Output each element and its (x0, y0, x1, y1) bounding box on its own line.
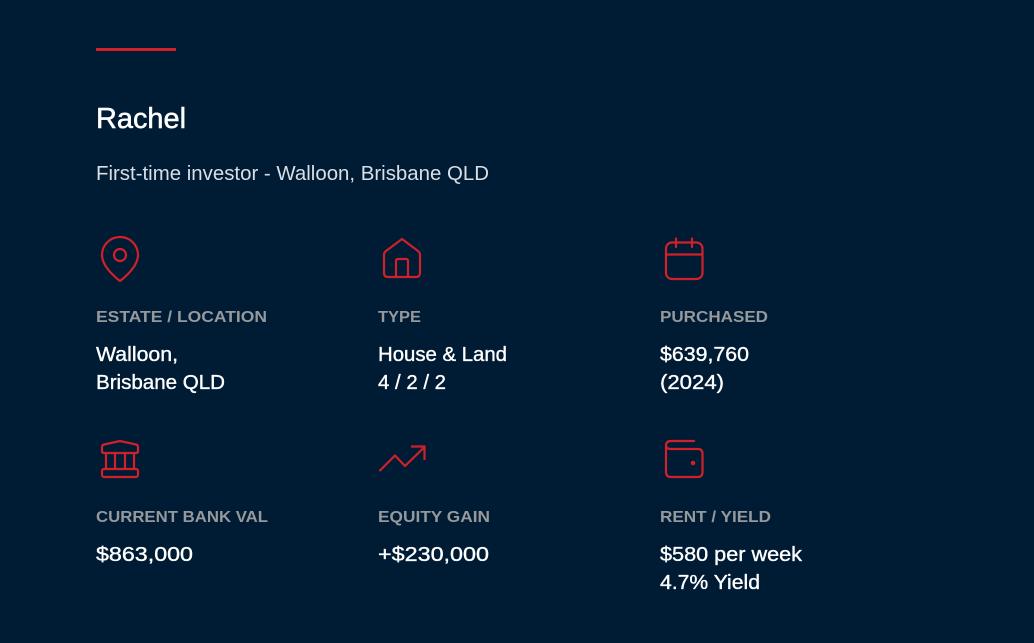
label: type: TYPE (378, 309, 421, 326)
icon: house (384, 239, 420, 277)
value: purchase price: $639,760 (660, 344, 749, 366)
icon: wallet (666, 441, 702, 477)
icon: map pin (102, 237, 138, 281)
icon: calendar (666, 238, 702, 279)
icon: trending arrow (380, 446, 424, 471)
value: type: 4 / 2 / 2 (378, 372, 446, 394)
value: rent and yield (660, 544, 803, 594)
label: rent / yield: RENT / YIELD (660, 509, 771, 526)
label: estate / location: ESTATE / LOCATION (96, 309, 267, 326)
value: equity gain: +$230,000 (378, 544, 489, 566)
value: rent and yield: 4.7% Yield (660, 572, 760, 594)
value: purchase price: (2024) (660, 372, 724, 394)
label: purchased: PURCHASED (660, 309, 768, 326)
value: location: Brisbane QLD (96, 372, 225, 394)
value: type: House & Land (378, 344, 507, 366)
label: current bank val: CURRENT BANK VAL (96, 509, 268, 526)
label: equity gain: EQUITY GAIN (378, 509, 490, 526)
value: purchase price (660, 344, 749, 394)
value: type (378, 344, 507, 394)
panel: estate / location (96, 237, 267, 394)
value: bank valuation: $863,000 (96, 544, 193, 566)
title: Rachel (96, 103, 186, 135)
subtitle: First-time investor - Walloon, Brisbane QLD (96, 163, 489, 185)
value: rent and yield: $580 per week (660, 544, 803, 566)
accent bar (96, 48, 176, 51)
panel: equity gain (378, 446, 490, 566)
panel: purchased (660, 238, 768, 394)
panel: type (378, 239, 507, 394)
icon: bank (102, 441, 138, 477)
value: location: Walloon, (96, 344, 178, 366)
value: location (96, 344, 225, 394)
panel: current bank val (96, 441, 268, 566)
panel: rent / yield (660, 441, 803, 594)
